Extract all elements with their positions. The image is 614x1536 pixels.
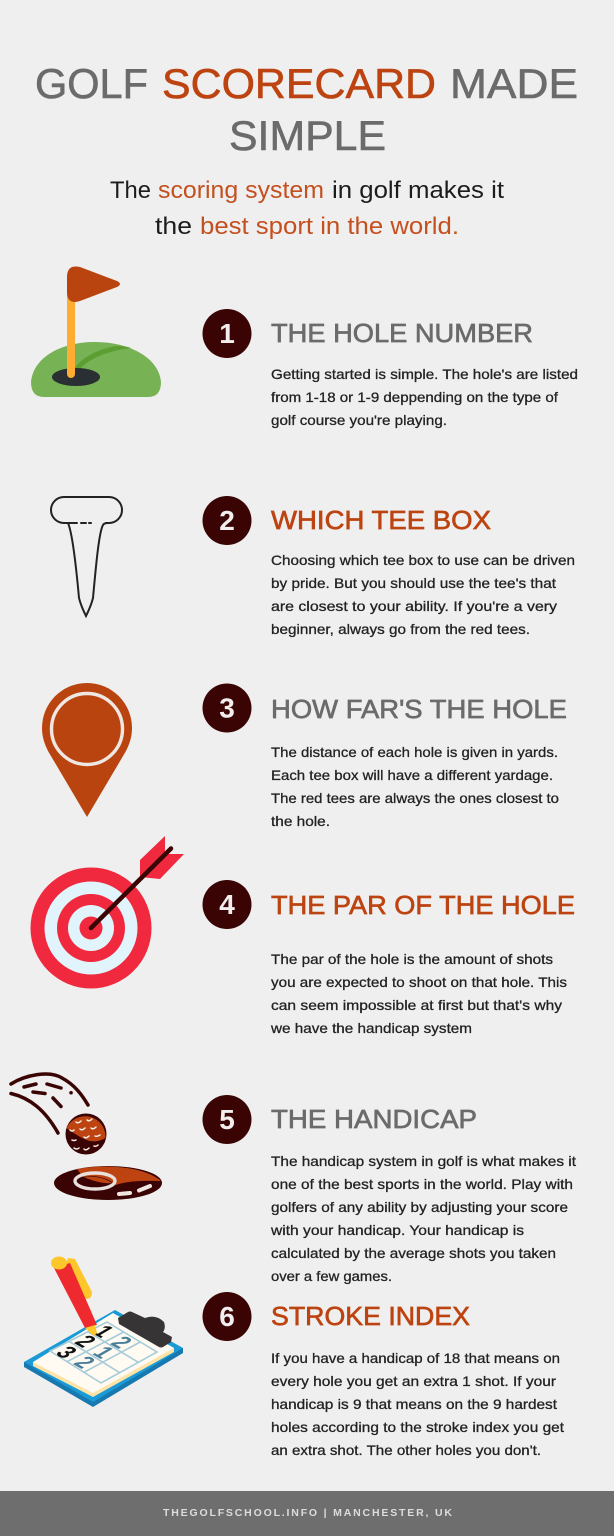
subtitle: best sport in the world. [200,213,459,240]
number badge 3: 3 [219,692,235,724]
body 5: with your handicap. Your handicap is [270,1223,524,1238]
body 5: golfers of any ability by adjusting your score [271,1200,568,1215]
heading 5: THE HANDICAP [271,1106,477,1134]
item 6 [202,1292,564,1458]
body 6: an extra shot. The other holes you don't. [271,1443,541,1458]
number badge 2: 2 [219,505,235,536]
body 3 [271,745,559,829]
body 6 [271,1351,564,1458]
icon: golf ball and hole [11,1074,162,1200]
body 4: can seem impossible at first but that's why [271,998,562,1013]
number badge 5 [202,1095,252,1144]
body 2 [271,553,575,637]
title: SCORECARD [162,60,436,107]
title: GOLF [35,60,148,107]
scorecard numbers: 1 [87,1343,120,1362]
heading 1: THE HOLE NUMBER [271,320,533,348]
body 5 [270,1154,576,1284]
subtitle: in golf makes it [332,177,504,204]
heading 2: WHICH TEE BOX [271,507,491,535]
subtitle: the [155,213,192,240]
number badge 4: 4 [219,889,235,920]
heading 4: THE PAR OF THE HOLE [271,892,575,920]
scorecard numbers: 1 [87,1322,120,1341]
body 1: golf course you're playing. [271,413,447,428]
number badge 3 [202,684,252,732]
icon: target with arrow [30,836,184,988]
body 5: calculated by the average shots you taken [271,1246,556,1261]
scorecard numbers: 3 [50,1343,83,1362]
body 6: every hole you get an extra 1 shot. If your [271,1374,556,1389]
item 5 [202,1095,576,1284]
scorecard numbers: 2 [105,1333,138,1352]
subtitle [110,177,504,240]
icon: scorecard clipboard and pen [24,1256,183,1407]
body 2: are closest to your ability. If you're a very [271,599,557,614]
body 2: beginner, always go from the red tees. [271,622,530,637]
body 3: the hole. [271,814,330,829]
icon: golf flag on green [31,266,161,397]
scorecard numbers [50,1322,138,1372]
item 2 [202,496,575,637]
item 4 [202,880,575,1036]
title [35,60,578,159]
body 6: If you have a handicap of 18 that means on [271,1351,560,1366]
scorecard numbers: 2 [69,1332,102,1351]
footer text: THEGOLFSCHOOL.INFO | MANCHESTER, UK [163,1507,452,1519]
body 2: by pride. But you should use the tee's that [271,576,556,591]
item 3 [202,684,567,829]
number badge 4 [202,880,252,929]
icon: golf tee [51,497,122,616]
body 5: one of the best sports in the world. Play with [271,1177,573,1192]
body 4 [270,952,567,1036]
icon: map pin [42,683,132,817]
body 1: Getting started is simple. The hole's are listed [271,367,578,382]
body 3: The distance of each hole is given in yards. [271,745,558,760]
item 1 [202,309,578,428]
number badge 6 [202,1292,252,1341]
body 4: The par of the hole is the amount of shots [271,952,553,967]
body 1: from 1-18 or 1-9 deppending on the type of [271,390,558,405]
footer bar [0,1491,614,1536]
heading 6: STROKE INDEX [271,1303,470,1331]
title: MADE [450,60,578,107]
number badge 5: 5 [219,1104,235,1135]
body 5: over a few games. [271,1269,392,1284]
subtitle: The [110,177,151,204]
body 6: handicap is 9 that means on the 9 hardest [271,1397,557,1412]
body 5: The handicap system in golf is what makes it [271,1154,576,1169]
scorecard numbers: 2 [68,1353,101,1372]
body 3: Each tee box will have a different yardage. [271,768,553,783]
number badge 1: 1 [219,318,235,349]
number badge 2 [202,496,252,545]
body 2: Choosing which tee box to use can be driven [271,553,575,568]
title: SIMPLE [229,112,386,159]
body 1 [271,367,578,428]
number badge 1 [202,309,252,358]
number badge 6: 6 [219,1301,235,1332]
subtitle: scoring system [158,177,324,204]
heading 3: HOW FAR'S THE HOLE [271,696,567,724]
body 4: we have the handicap system [270,1021,472,1036]
body 6: holes according to the stroke index you get [271,1420,564,1435]
body 3: The red tees are always the ones closest to [271,791,559,806]
body 4: you are expected to shoot on that hole. This [271,975,567,990]
